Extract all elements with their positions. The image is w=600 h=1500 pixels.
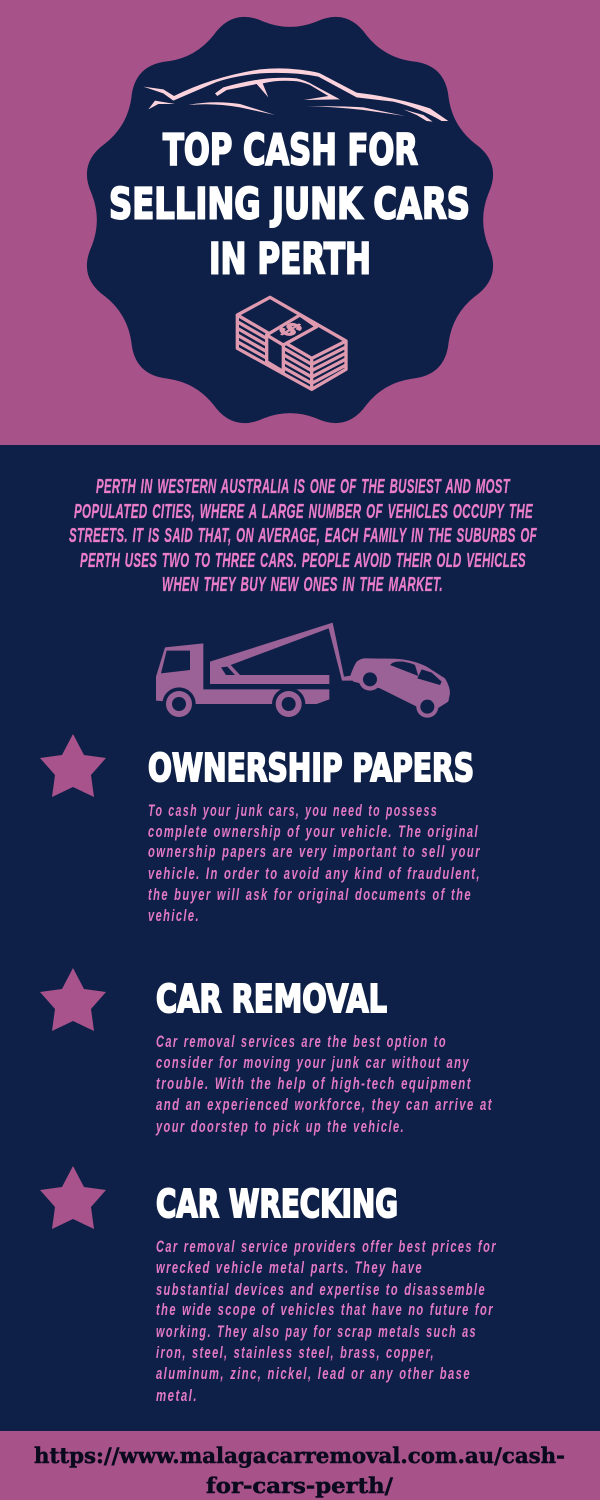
title: TOP CASH FOR	[163, 126, 418, 176]
title	[109, 126, 470, 284]
text: car wrecking body: wrecked vehicle metal parts. They have	[156, 1258, 423, 1277]
icon: tow truck pulling car	[156, 623, 450, 721]
icon: star 3	[40, 1166, 106, 1229]
heading: ownership papers: OWNERSHIP PAPERS	[148, 746, 474, 790]
text: car wrecking body: metal.	[156, 1386, 198, 1405]
text: ownership papers body	[148, 801, 481, 925]
text: ownership papers body: vehicle.	[148, 906, 200, 925]
scalloped navy badge	[87, 17, 493, 423]
footer url: for-cars-perth/	[206, 1473, 393, 1498]
text: car wrecking body	[156, 1237, 497, 1405]
header background band	[0, 0, 600, 445]
text: ownership papers body: To cash your junk cars, you need to possess	[148, 801, 438, 820]
footer url: https://www.malagacarremoval.com.au/cash-	[34, 1443, 565, 1468]
text: car removal body	[155, 1032, 493, 1136]
footer url	[34, 1443, 565, 1498]
heading: car wrecking: CAR WRECKING	[156, 1182, 398, 1226]
icon: star 2	[40, 968, 106, 1031]
icon: stack of money: $	[272, 319, 308, 340]
icon: star 1	[40, 734, 106, 797]
heading: car removal: CAR REMOVAL	[156, 977, 387, 1021]
title: IN PERTH	[209, 234, 371, 284]
text: car removal body: your doorstep to pick up the vehicle.	[155, 1117, 405, 1136]
title: SELLING JUNK CARS	[109, 180, 470, 230]
icon: stack of money	[237, 297, 346, 389]
intro paragraph	[69, 475, 537, 596]
icon: sports car outline	[143, 68, 448, 122]
text: car wrecking body: iron, steel, stainless steel, brass, copper,	[156, 1343, 435, 1362]
footer band	[0, 1431, 600, 1500]
text: car removal body: Car removal services are the best option to	[156, 1032, 447, 1051]
